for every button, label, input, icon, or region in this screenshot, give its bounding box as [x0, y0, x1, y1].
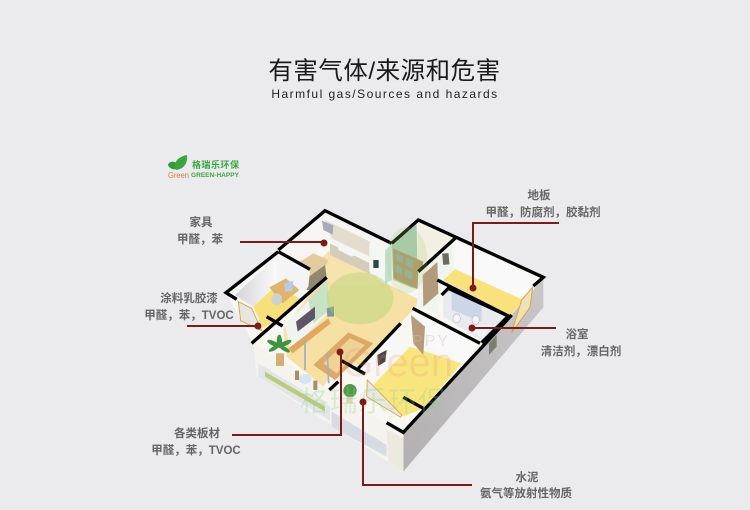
main wood floor: [283, 272, 420, 387]
watermark: chinese name: 格瑞乐环保: [300, 386, 448, 417]
balcony glass doors: [305, 340, 329, 383]
wall picture: [442, 253, 449, 265]
isometric apartment floor plan: [226, 210, 543, 472]
label text: flooring: 地板: [528, 188, 551, 202]
living room tv wall: [285, 283, 327, 350]
subtitle: Harmful gas/Sources and hazards: [271, 87, 499, 101]
label: flooring: [470, 188, 600, 292]
label text: latex paint: 涂料乳胶漆: [160, 291, 218, 305]
left bedroom back wall: [235, 257, 277, 307]
balcony railing with flowers: [258, 363, 387, 457]
label detail: boards: 甲醛，苯，TVOC: [151, 443, 241, 457]
label: cement: [360, 398, 572, 500]
logo wordmark: Green: [168, 170, 189, 180]
bathroom floor and wall: [443, 290, 507, 342]
label text: boards: 各类板材: [174, 426, 220, 440]
left bedroom side wall: [277, 255, 310, 298]
label detail: flooring: 甲醛，防腐剂，胶黏剂: [486, 205, 600, 219]
green glass partition: [392, 224, 417, 288]
upper right room wall: [455, 240, 542, 300]
potted plant large: [266, 335, 292, 366]
watermark: GC rings: [327, 227, 427, 324]
label detail: furniture: 甲醛，苯: [177, 232, 223, 246]
kitchen cabinets: [325, 220, 370, 257]
bedroom wall picture: [377, 350, 387, 366]
upper right room yellow floor: [443, 269, 523, 316]
lower bedroom yellow floor: [373, 347, 462, 417]
leader line: boards: [232, 348, 344, 435]
exterior wall window: [489, 335, 497, 355]
leader line: latex paint: [187, 322, 262, 330]
refrigerator side panel: [385, 245, 392, 284]
leader line: cement: [360, 398, 472, 485]
logo chinese name: 格瑞乐环保: [192, 159, 239, 170]
glass grid door: [393, 248, 423, 290]
exterior front wall: [253, 343, 403, 472]
label detail: cement: 氨气等放射性物质: [480, 486, 572, 500]
label: bathroom: [468, 324, 621, 358]
lower bedroom back wall: [410, 312, 478, 363]
bathroom fixtures: [453, 314, 460, 323]
potted plant small: [343, 384, 357, 403]
balcony table and chairs: [295, 371, 317, 390]
television: [296, 307, 315, 332]
label: furniture: [177, 215, 328, 246]
pale green glass panel: [308, 279, 329, 323]
label detail: bathroom: 清洁剂，漂白剂: [541, 344, 621, 358]
kitchen wood floor: [310, 250, 387, 287]
dining table: [300, 253, 328, 278]
black structural walls: [226, 211, 543, 432]
exterior corner pillar: [387, 430, 403, 472]
desk: [269, 278, 299, 303]
logo: [168, 155, 239, 180]
corridor upper wall: [417, 223, 452, 267]
refrigerator: [369, 244, 385, 284]
label: boards: [151, 348, 344, 457]
living room rug: [313, 332, 373, 380]
hallway wall and door: [417, 242, 453, 315]
label detail: latex paint: 甲醛，苯，TVOC: [144, 308, 234, 322]
lower bedroom side wall: [360, 324, 402, 380]
kitchen back wall: [283, 213, 390, 270]
bedroom door: [411, 315, 425, 355]
logo english name: GREEN-HAPPY: [191, 172, 239, 179]
label text: cement: 水泥: [516, 470, 539, 484]
watermark: HAPPY: PPY: [412, 333, 450, 350]
tv cabinet: [288, 318, 331, 353]
upper right window frame: [512, 287, 533, 333]
speaker set: [327, 306, 334, 317]
leader line: flooring: [470, 223, 559, 292]
label text: furniture: 家具: [190, 215, 213, 229]
watermark: Green: Green: [342, 341, 453, 385]
title: 有害气体/来源和危害: [268, 57, 501, 85]
bedroom front window: [367, 380, 402, 417]
icon: leaves: [168, 155, 187, 170]
office chair: [271, 293, 282, 305]
leader line: furniture: [240, 240, 328, 246]
left bedroom window: [238, 302, 262, 331]
label text: bathroom: 浴室: [566, 327, 588, 341]
bathroom mirror: [452, 292, 482, 322]
exterior right wall: [403, 277, 543, 472]
kitchen window: [322, 221, 333, 235]
label: latex paint: [144, 291, 262, 330]
left bedroom yellow floor: [253, 287, 300, 328]
leader line: bathroom: [468, 324, 556, 332]
white plan base: [226, 210, 543, 433]
